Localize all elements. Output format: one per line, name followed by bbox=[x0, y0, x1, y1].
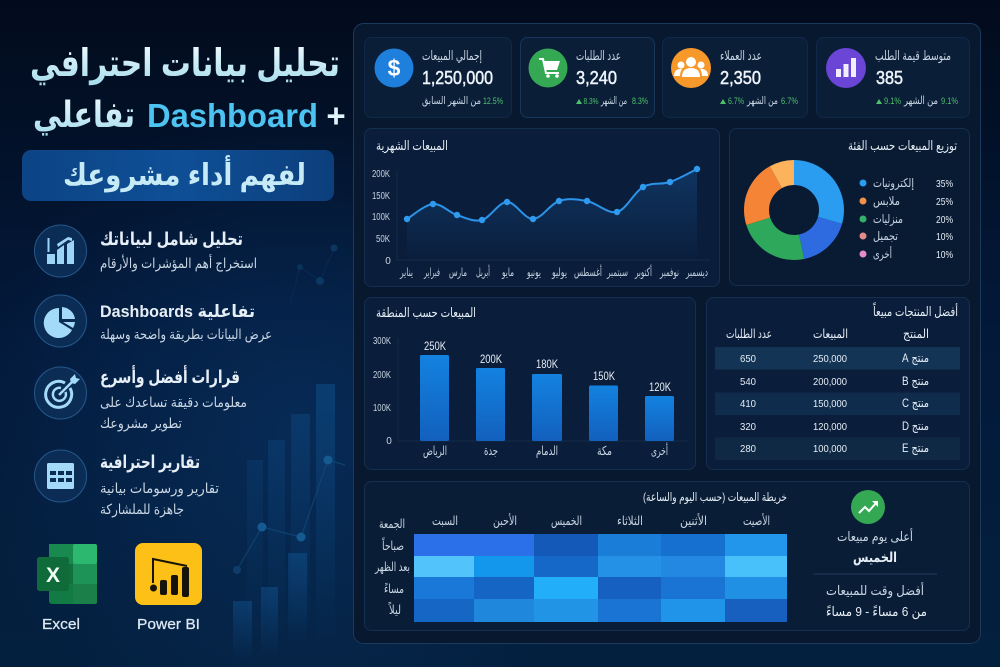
month labels: مارس bbox=[449, 267, 467, 280]
table rows: 200,000 bbox=[813, 376, 847, 388]
month labels: أغسطس bbox=[574, 264, 602, 280]
y axis labels: 0 bbox=[385, 256, 391, 267]
month labels: يونيو bbox=[526, 267, 541, 280]
donut legend: 10% bbox=[936, 231, 953, 243]
donut legend: إلكترونيات bbox=[873, 176, 914, 191]
subtitle pill: لفهم أداء مشروعك bbox=[63, 155, 306, 193]
bar value labels bbox=[424, 341, 671, 394]
region labels: الدمام bbox=[536, 444, 558, 458]
donut legend: 10% bbox=[936, 249, 953, 261]
KPI card: total sales: 12.5% bbox=[483, 96, 503, 106]
region labels: الرياض bbox=[423, 444, 447, 459]
day labels: الأثنين bbox=[680, 513, 707, 529]
KPI card: average order value bbox=[816, 38, 970, 118]
feature: professional reports bbox=[34, 450, 219, 518]
day labels: الأحبن bbox=[493, 513, 517, 529]
insight: best sales time bbox=[826, 582, 927, 620]
donut legend: ملابس bbox=[873, 194, 900, 209]
panel: top products table bbox=[706, 298, 970, 470]
region labels: جدة bbox=[484, 444, 498, 458]
KPI card: customers: 6.7% bbox=[781, 96, 798, 106]
y axis labels bbox=[372, 169, 391, 267]
y axis labels: 50K bbox=[376, 234, 390, 245]
bar value labels: 150K bbox=[593, 371, 615, 383]
KPI card: total sales: من الشهر السابق bbox=[422, 95, 481, 107]
icon: Excel: X bbox=[46, 564, 60, 587]
icon: Power BI bbox=[135, 543, 202, 633]
table rows: 150,000 bbox=[813, 398, 847, 410]
KPI card: customers: 6.7% bbox=[728, 96, 744, 106]
table rows: منتج C bbox=[902, 396, 929, 410]
table rows: 280 bbox=[740, 443, 756, 455]
feature: interactive dashboards bbox=[34, 295, 272, 347]
table rows: 540 bbox=[740, 376, 756, 388]
subtitle pill bbox=[22, 150, 334, 201]
KPI card: customers: عدد العملاء bbox=[720, 48, 762, 63]
month labels: نوفمبر bbox=[659, 267, 679, 280]
donut chart bbox=[756, 172, 832, 248]
table header: عدد الطلبات bbox=[726, 327, 772, 341]
table header: المنتج bbox=[903, 327, 929, 341]
month labels bbox=[399, 264, 708, 280]
KPI card: total sales bbox=[364, 38, 512, 118]
title: + bbox=[326, 97, 346, 134]
bars bbox=[398, 338, 688, 441]
KPI card: average order value: متوسط قيمة الطلب bbox=[875, 48, 951, 64]
table rows: 410 bbox=[740, 398, 756, 410]
region labels: أخرى bbox=[651, 442, 668, 459]
icon: Excel bbox=[37, 544, 97, 633]
KPI card: orders: 3,240 bbox=[576, 68, 617, 88]
feature: interactive dashboards: عرض البيانات بطريقة واضحة وسهلة bbox=[100, 326, 272, 343]
day labels: الثلاثاء bbox=[617, 514, 643, 528]
insight: top sales day: أعلى يوم مبيعات bbox=[837, 528, 913, 545]
heatmap grid bbox=[414, 534, 787, 622]
month labels: مايو bbox=[501, 267, 514, 280]
month labels: سبتمبر bbox=[606, 267, 628, 280]
table header: المبيعات bbox=[813, 327, 848, 341]
month labels: يوليو bbox=[551, 267, 567, 280]
panel: monthly sales line chart bbox=[364, 128, 720, 286]
title: تفاعلي bbox=[33, 94, 135, 136]
KPI card: average order value: 9.1% bbox=[941, 96, 958, 107]
feature: better decisions: قرارات أفضل وأسرع bbox=[100, 365, 240, 388]
donut legend bbox=[860, 176, 953, 262]
panel: sales by region bar chart bbox=[364, 298, 696, 470]
time labels: مساءً bbox=[384, 582, 404, 596]
day labels: السبت bbox=[432, 514, 458, 528]
bar value labels: 250K bbox=[424, 341, 446, 353]
month labels: فبراير bbox=[423, 267, 440, 280]
insight: best sales time: من 6 مساءً - 9 مساءً bbox=[826, 604, 927, 620]
heading: best selling products: أفضل المنتجات مبيعاً bbox=[873, 302, 958, 319]
time labels: بعد الظهر bbox=[374, 560, 410, 575]
feature: better decisions bbox=[34, 365, 247, 432]
KPI card: total sales: 1,250,000 bbox=[422, 68, 493, 88]
donut legend: تجميل bbox=[873, 229, 898, 243]
heading: monthly sales: المبيعات الشهرية bbox=[376, 138, 448, 154]
decorative background chart bbox=[233, 244, 345, 661]
bar y axis labels bbox=[373, 336, 392, 447]
feature: comprehensive analysis: تحليل شامل لبياناتك bbox=[100, 229, 243, 249]
y axis labels: 200K bbox=[372, 169, 390, 180]
dashboard panel bbox=[354, 24, 980, 644]
feature: interactive dashboards: تفاعلية Dashboards bbox=[100, 302, 255, 321]
KPI card: customers bbox=[662, 38, 808, 118]
insight: top sales day: الخميس bbox=[853, 549, 897, 565]
KPI card: orders: عدد الطلبات bbox=[576, 48, 621, 63]
table rows: 650 bbox=[740, 353, 756, 365]
bar y axis labels: 200K bbox=[373, 370, 391, 381]
day labels: الخميس bbox=[551, 514, 582, 529]
bar value labels: 180K bbox=[536, 359, 558, 371]
bar y axis labels: 100K bbox=[373, 403, 391, 414]
month labels: أكتوبر bbox=[634, 264, 652, 280]
panel: sales by category donut bbox=[730, 128, 970, 286]
table header bbox=[726, 327, 929, 341]
month labels: أبريل bbox=[476, 264, 490, 280]
KPI card: total sales: إجمالي المبيعات bbox=[422, 48, 482, 63]
KPI card: orders: 8.3% bbox=[584, 96, 599, 106]
table rows: 120,000 bbox=[813, 421, 847, 433]
region labels: مكة bbox=[597, 444, 612, 458]
heading: heatmap: خريطة المبيعات (حسب اليوم والساعة) bbox=[643, 490, 787, 505]
month labels: ديسمبر bbox=[685, 267, 708, 280]
bar y axis labels: 0 bbox=[386, 436, 392, 447]
table rows: 250,000 bbox=[813, 353, 847, 365]
time labels: صباحاً bbox=[382, 536, 404, 553]
KPI card: orders: من الشهر bbox=[600, 95, 627, 107]
icon: Excel: Excel bbox=[42, 616, 80, 633]
icon: Power BI: Power BI bbox=[137, 616, 200, 633]
heading: sales by region: المبيعات حسب المنطقة bbox=[376, 305, 476, 320]
table rows: 100,000 bbox=[813, 443, 847, 455]
panel: sales heatmap bbox=[364, 482, 970, 630]
feature: better decisions: معلومات دقيقة تساعدك على bbox=[100, 394, 247, 411]
insight: top sales day bbox=[837, 490, 913, 565]
region labels bbox=[423, 442, 668, 459]
table rows: منتج A bbox=[902, 351, 929, 365]
feature: professional reports: تقارير ورسومات بيانية bbox=[100, 480, 219, 497]
KPI card: customers: 2,350 bbox=[720, 68, 761, 88]
feature: better decisions: تطوير مشروعك bbox=[100, 415, 182, 432]
KPI card: customers: من الشهر bbox=[746, 95, 778, 107]
time labels bbox=[374, 517, 410, 617]
heading: category distribution: توزيع المبيعات حسب الفئة bbox=[848, 138, 957, 154]
table rows: منتج D bbox=[902, 419, 929, 433]
donut legend: أخرى bbox=[873, 246, 892, 262]
KPI card: average order value: 385 bbox=[876, 68, 903, 88]
KPI card: average order value: من الشهر bbox=[903, 95, 938, 107]
table rows bbox=[715, 347, 960, 460]
month labels: يناير bbox=[399, 267, 413, 280]
y axis labels: 150K bbox=[372, 191, 390, 202]
feature: professional reports: جاهزة للملشاركة bbox=[100, 501, 184, 518]
donut legend: 25% bbox=[936, 196, 953, 208]
day labels bbox=[432, 513, 770, 529]
KPI card: total sales: $ bbox=[388, 55, 401, 81]
insight: best sales time: أفضل وقت للمبيعات bbox=[826, 582, 924, 599]
feature: comprehensive analysis: استخراج أهم المؤشرات والأرقام bbox=[100, 254, 257, 272]
title bbox=[30, 43, 346, 136]
time labels: الجمعة bbox=[379, 517, 405, 531]
table rows: منتج E bbox=[902, 441, 929, 455]
donut legend: 20% bbox=[936, 214, 953, 226]
bar value labels: 200K bbox=[480, 354, 502, 366]
KPI card: orders bbox=[520, 38, 654, 118]
day labels: الأصيت bbox=[743, 513, 770, 528]
title: تحليل بيانات احترافي bbox=[30, 43, 340, 85]
donut legend: منزليات bbox=[873, 212, 903, 227]
donut legend: 35% bbox=[936, 178, 953, 190]
title: Dashboard bbox=[147, 97, 318, 134]
feature: comprehensive analysis bbox=[34, 225, 257, 277]
bar y axis labels: 300K bbox=[373, 336, 391, 347]
table rows: 320 bbox=[740, 421, 756, 433]
time labels: ليلاً bbox=[388, 601, 401, 617]
y axis labels: 100K bbox=[372, 212, 390, 223]
KPI card: orders: 8.3% bbox=[632, 96, 648, 106]
table rows: منتج B bbox=[902, 374, 929, 388]
bar value labels: 120K bbox=[649, 382, 671, 394]
line chart bbox=[397, 166, 710, 260]
feature: professional reports: تقارير احترافية bbox=[100, 452, 200, 473]
KPI card: average order value: 9.1% bbox=[884, 96, 901, 107]
